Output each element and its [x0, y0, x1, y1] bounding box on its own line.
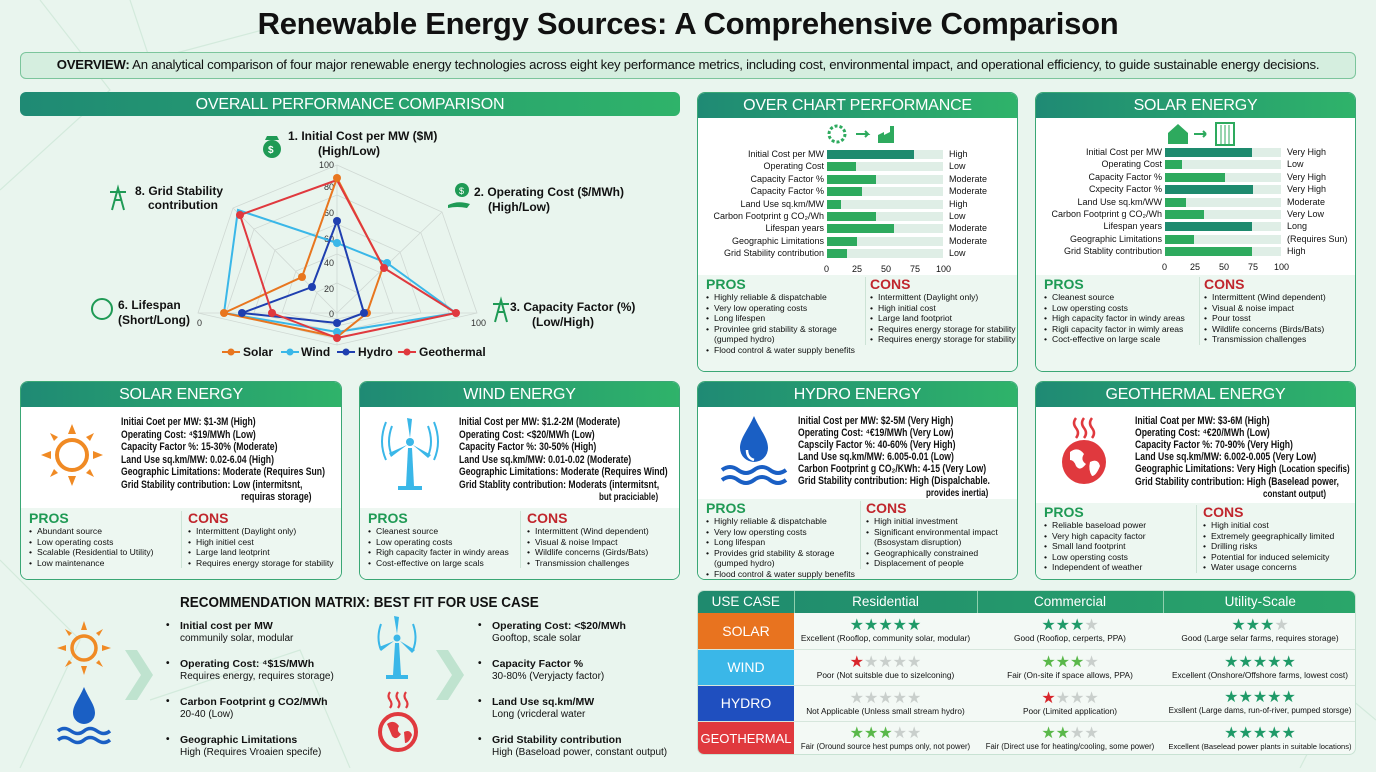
radar chart: (Short/Long) [118, 313, 190, 327]
pros and cons: Abundant source [37, 526, 102, 536]
pros and cons: Reliable baseload power [1052, 520, 1146, 530]
radar chart: 60 [324, 208, 334, 218]
bar chart [713, 149, 987, 274]
bar chart: High [949, 199, 968, 209]
pros and cons: Intermittent (Daylight only) [878, 292, 978, 302]
bar chart: 100 [936, 264, 951, 274]
icons: $ [459, 186, 464, 196]
facts: Capacity Factor %: 30-50% (High) [459, 441, 596, 453]
facts: Operating Cost: ⁴€19/MWh (Very Low) [798, 427, 953, 439]
panel: solar energy bars: Capacity Factor % [1088, 172, 1162, 182]
pros and cons: High initial investment [874, 516, 958, 526]
facts: but praciciable) [599, 492, 658, 503]
pros and cons: Low operating costs [376, 537, 452, 547]
heading [698, 382, 1017, 407]
bar chart [1051, 147, 1348, 272]
facts: Land Use sq.km/MW: 0.01-0.02 (Moderate) [459, 454, 631, 466]
facts: Carbon Footprint g CO₂/KWh: 4-15 (Very Low) [798, 463, 986, 475]
bar chart: Moderate [949, 186, 987, 196]
pros and cons: Transmission challenges [1212, 334, 1306, 344]
facts: Capscily Factor %: 40-60% (Very High) [798, 439, 955, 451]
use case table: Residential [852, 594, 919, 609]
pros and cons: Cleanest source [1052, 292, 1114, 302]
use case table: USE CASE [712, 594, 780, 609]
radar chart: 40 [324, 258, 334, 268]
bar chart: 25 [852, 264, 862, 274]
facts: requiras storage) [241, 491, 312, 503]
bar chart: Very Low [1287, 209, 1324, 219]
panel: overall performance comparison (radar) [20, 92, 680, 359]
pros and cons: CONS [866, 500, 906, 516]
radar chart [91, 129, 635, 359]
bar chart: High [949, 149, 968, 159]
pros and cons: CONS [1203, 504, 1243, 520]
pros and cons: Highly reliable & dispatchable [714, 516, 827, 526]
panel: solar energy bars: Geographic Limitations [1070, 234, 1162, 244]
bar chart: 75 [910, 264, 920, 274]
radar chart: (Low/High) [532, 315, 594, 329]
facts [459, 416, 668, 503]
bullet list 1: Carbon Footprint g CO2/MWh [180, 696, 328, 708]
pros and cons: Requires energy storage for stability [196, 558, 334, 568]
bar chart: Long [1287, 221, 1307, 231]
panel: solar energy bars: 0 [1162, 262, 1167, 272]
bullet list 1: High (Requires Vroaien specife) [180, 747, 321, 758]
panel: over chart performance: Carbon Footprint g CO₂/Wh [713, 211, 824, 221]
pros and cons: Large land leotprint [196, 547, 270, 557]
pros and cons [360, 508, 679, 579]
pros and cons: Requires energy storage for stability [878, 324, 1016, 334]
bar chart: 75 [1248, 262, 1258, 272]
icon: sun [57, 621, 111, 675]
heading [698, 93, 1017, 118]
radar chart: 6. Lifespan [118, 298, 181, 312]
facts: provides inertia) [926, 488, 988, 499]
bar chart: 100 [1274, 262, 1289, 272]
panel: over chart performance [697, 92, 1018, 372]
pros and cons: Coct-effective on large scale [1052, 334, 1160, 344]
bar chart: Moderate [1287, 197, 1325, 207]
heading: SOLAR ENERGY [119, 386, 243, 403]
heading [20, 92, 680, 116]
pros and cons: Independent of weather [1052, 562, 1142, 572]
facts: Initial Coat per MW: $3-6M (High) [1135, 415, 1270, 427]
pros and cons: Intermittent (Wind dependent) [535, 526, 649, 536]
pros and cons: CONS [870, 276, 910, 292]
facts: Capacity Factor %: 15-30% (Moderate) [121, 441, 277, 453]
pros and cons: Long lifespan [714, 537, 765, 547]
heading [1036, 93, 1355, 118]
radar chart: 2. Operating Cost ($/MWh) [474, 185, 624, 199]
pros and cons: Cost-effective on large scals [376, 558, 484, 568]
pros and cons: Provinlee grid stability & storage (gumped hydro) [714, 324, 837, 344]
facts: constant output) [1263, 489, 1326, 500]
bar chart: Very High [1287, 172, 1326, 182]
pros and cons: Transmission challenges [535, 558, 629, 568]
use case table: Poor (Limited application) [1023, 706, 1117, 716]
heading [1036, 382, 1355, 407]
bullet list 2 [478, 620, 667, 758]
facts: Grid Stability contribution: Low (intermitsnt, [121, 478, 302, 490]
pros and cons: Highly reliable & dispatchable [714, 292, 827, 302]
use case table: ★★★★★ [1224, 689, 1296, 706]
panel: wind energy [359, 381, 680, 580]
use case table: Good (Large selar farms, requires storage) [1181, 633, 1339, 643]
facts: Capacity Factor %: 70-90% (Very High) [1135, 439, 1293, 451]
icons: house to panel [1168, 122, 1235, 146]
panel: over chart performance: Land Use sq.km/MW [740, 199, 824, 209]
radar chart: 60 [324, 234, 334, 244]
facts: Land Use sq.km/MW: 0.02-6.04 (High) [121, 454, 274, 466]
bullet list 1: communily solar, modular [180, 633, 293, 644]
use case table: ★★★★ [1041, 617, 1099, 634]
use case table: HYDRO [721, 695, 771, 711]
pros and cons: High initiel cest [196, 537, 254, 547]
title: Renewable Energy Sources: A Comprehensive Comparison [258, 6, 1118, 41]
facts: Operating Cost: ⁴€20/MWh (Low) [1135, 427, 1270, 439]
use case table [697, 590, 1356, 755]
legend [222, 345, 486, 359]
panel: solar energy bars: Lifespan years [1103, 221, 1162, 231]
arrow [436, 650, 464, 700]
pros and cons [698, 275, 1017, 371]
use case table: Not Applicable (Unless small stream hydro) [806, 706, 965, 716]
pros and cons: Pour tosst [1212, 313, 1251, 323]
pros and cons: PROS [1044, 276, 1084, 292]
panel: over chart performance: Initial Cost per MW [748, 149, 824, 159]
panel: solar energy bars: Grid Stablity contribution [1064, 246, 1162, 256]
bullet list 2: High (Baseload power, constant output) [492, 747, 667, 758]
heading [21, 382, 341, 407]
radar chart: 3. Capacity Factor (%) [510, 300, 635, 314]
use case table: Exsllent (Large dams, run-of-river, pumped storsge) [1169, 706, 1351, 715]
pros and cons: Low opersting costs [1052, 303, 1128, 313]
heading: SOLAR ENERGY [1134, 97, 1257, 114]
pros and cons: High capacity factor in windy areas [1052, 313, 1185, 323]
radar chart: contribution [148, 198, 218, 212]
facts: Operating Cost: <$20/MWh (Low) [459, 428, 595, 440]
panel: over chart performance: Lifespan years [765, 223, 824, 233]
radar chart: (High/Low) [488, 200, 550, 214]
facts: Geographic Limitations: Very High (Location specifis) [1135, 463, 1350, 475]
pros and cons: Flood control & water supply benefits [714, 345, 855, 355]
panel: over chart performance: Grid Stability contribution [724, 248, 824, 258]
panel: solar energy bars: Initial Cost per MW [1086, 147, 1162, 157]
use case table: ★★★★★ [850, 690, 921, 706]
pros and cons: Righ capacity facter in windy areas [376, 547, 509, 557]
pros and cons: PROS [368, 510, 408, 526]
panel: solar energy bars: Operating Cost [1101, 159, 1162, 169]
panel: solar energy bars [1035, 92, 1356, 372]
pros and cons: Long lifespen [714, 313, 765, 323]
bar chart: Moderate [949, 236, 987, 246]
pros and cons: Very low operating costs [714, 303, 807, 313]
pros and cons: Intermittent (Wind dependent) [1212, 292, 1326, 302]
use case table: Fair (On-site if space allows, PPA) [1007, 670, 1133, 680]
bullet list 2: Long (vricderal water [492, 709, 585, 720]
bar chart: Low [949, 248, 966, 258]
bar chart: Low [1287, 159, 1304, 169]
facts: Initiai Coet per MW: $1-3M (High) [121, 416, 256, 428]
pros and cons [1036, 275, 1355, 371]
panel: solar energy [20, 381, 342, 580]
heading: RECOMMENDATION MATRIX: BEST FIT FOR USE CASE [180, 594, 539, 611]
pros and cons: CONS [1204, 276, 1244, 292]
icons: $ [268, 145, 274, 156]
pros and cons: Low maintenance [37, 558, 104, 568]
use case table: ★★★★ [1231, 617, 1289, 634]
legend: Wind [301, 345, 330, 359]
pros and cons: Requires energy storage for stability [878, 334, 1016, 344]
pros and cons: Intermittent (Daylight only) [196, 526, 296, 536]
legend: Hydro [358, 345, 393, 359]
use case table: Utility-Scale [1225, 594, 1296, 609]
pros and cons: Visual & noise impact [1212, 303, 1294, 313]
icon: water drop [720, 416, 788, 485]
use case table: ★★★★ [1041, 725, 1099, 742]
pros and cons: Very high capacity factor [1052, 531, 1146, 541]
use case table: WIND [727, 659, 765, 675]
pros and cons [1036, 503, 1355, 579]
bar chart: High [1287, 246, 1306, 256]
pros and cons: Visual & noise Impact [535, 537, 617, 547]
panel: over chart performance: Geographic Limitations [732, 236, 824, 246]
radar chart: 100 [319, 160, 334, 170]
bullet list 2: Gooftop, scale solar [492, 633, 581, 644]
facts: Initial Cost per MW: $2-5M (Very High) [798, 415, 953, 427]
pros and cons: PROS [1044, 504, 1084, 520]
radar chart: 8. Grid Stability [135, 184, 223, 198]
overview box: OVERVIEW: An analytical comparison of four major renewable energy technologies across eight key performance metrics, including cost, environmental impact, and operational efficiency, to guide sustainable energy decisions. [57, 57, 1319, 72]
radar chart: 20 [324, 284, 334, 294]
use case table: ★★★★★ [850, 725, 921, 742]
pros and cons: Drilling risks [1211, 541, 1257, 551]
bullet list 2: Grid Stability contribution [492, 734, 622, 746]
bar chart: 50 [881, 264, 891, 274]
facts: Land Use sq.km/MW: 6.005-0.01 (Low) [798, 451, 954, 463]
facts: Operating Cost: ⁴$19/MWh (Low) [121, 428, 256, 440]
bullet list 1: Operating Cost: ⁴$1S/MWh [180, 658, 314, 670]
use case table: Poor (Not suitsble due to sizelconing) [817, 670, 954, 680]
bullet list 2: 30-80% (Veryjacty factor) [492, 671, 604, 682]
panel: solar energy bars: Carbon Footprint g CO₂/Wh [1051, 209, 1162, 219]
panel: over chart performance: Capacity Factor % [750, 186, 824, 196]
use case table: Excellent (Onshore/Offshore farms, lowest cost) [1172, 670, 1348, 680]
use case table: GEOTHERMAL [700, 731, 792, 746]
use case table: ★★★★★ [850, 617, 921, 634]
bullet list 1: Geographic Limitations [180, 734, 297, 746]
icons: gear to factory [828, 124, 894, 144]
bar chart: Moderate [949, 174, 987, 184]
panel: hydro energy [697, 381, 1018, 580]
radar chart: 0 [329, 309, 334, 319]
heading: HYDRO ENERGY [794, 386, 921, 403]
pros and cons: Wildlife concerns (Girds/Bats) [535, 547, 648, 557]
use case table: SOLAR [722, 623, 770, 639]
use case table: Good (Roofiop, cerperts, PPA) [1014, 633, 1126, 643]
facts: Land Use sq.km/MW: 6.002-0.005 (Very Low) [1135, 451, 1316, 463]
panel: over chart performance: Capacity Factor % [750, 174, 824, 184]
use case table: Commercial [1034, 594, 1106, 609]
icon: water drop [56, 687, 112, 744]
pros and cons: Wildlife concerns (Birds/Bats) [1212, 324, 1324, 334]
bar chart: Moderate [949, 223, 987, 233]
bullet list 2: Operating Cost: <$20/MWh [492, 620, 626, 632]
use case table: Excellent (Rooflop, community solar, modular) [801, 633, 970, 643]
use case table: ★★★★★ [1224, 654, 1296, 670]
bar chart: 50 [1219, 262, 1229, 272]
use case table: Fair (Direct use for heating/cooling, some power) [986, 742, 1154, 751]
bullet list 1: Initial cost per MW [180, 620, 273, 632]
panel: solar energy bars: Cxpecity Factor % [1089, 184, 1162, 194]
pros and cons: CONS [188, 510, 228, 526]
use case table: Excellent (Baselead power plants in suitable locations) [1168, 742, 1352, 751]
pros and cons: Low operating costs [37, 537, 113, 547]
arrow [125, 650, 153, 700]
radar chart: 1. Initial Cost per MW ($M) [288, 129, 437, 143]
radar chart: 0 [197, 318, 202, 328]
bullet list 2: Capacity Factor % [492, 658, 583, 670]
pros and cons: Potential for induced selemicity [1211, 552, 1329, 562]
pros and cons: Extremely geegraphically limited [1211, 531, 1334, 541]
heading: OVERALL PERFORMANCE COMPARISON [196, 96, 504, 113]
pros and cons: CONS [527, 510, 567, 526]
facts: Grid Stability contribution: High (Dispalchable. [798, 475, 990, 487]
pros and cons: Displacement of people [874, 558, 964, 568]
pros and cons: Water usage concerns [1211, 562, 1297, 572]
panel: solar energy bars: Land Use sq.km/WW [1077, 197, 1162, 207]
pros and cons: Very low opersting costs [714, 527, 807, 537]
bar chart: 25 [1190, 262, 1200, 272]
pros and cons: Provides grid stability & storage (gumped hydro) [714, 548, 834, 568]
icon: wind turbine [378, 616, 416, 679]
bar chart: (Requires Sun) [1287, 234, 1348, 244]
pros and cons: High initial cost [1211, 520, 1269, 530]
use case table: ★★★★★ [850, 654, 921, 670]
radar chart: (High/Low) [318, 144, 380, 158]
pros and cons: Geographically constrained [874, 548, 978, 558]
legend: Geothermal [419, 345, 486, 359]
heading [360, 382, 679, 407]
pros and cons [698, 499, 1017, 579]
icon: wind turbine [381, 418, 439, 490]
legend: Solar [243, 345, 273, 359]
bar chart: Low [949, 161, 966, 171]
pros and cons [21, 508, 341, 579]
bar chart: Low [949, 211, 966, 221]
icon: globe [378, 691, 418, 752]
facts: Initial Cost per MW: $1.2-2M (Moderate) [459, 416, 620, 428]
heading: OVER CHART PERFORMANCE [743, 97, 972, 114]
pros and cons: PROS [706, 276, 746, 292]
recommendation matrix [56, 594, 667, 758]
facts [798, 415, 990, 499]
pros and cons: Low opersting costs [1052, 552, 1128, 562]
panel: over chart performance: 0 [824, 264, 829, 274]
pros and cons: Rigli capacity factor in wimly areas [1052, 324, 1183, 334]
heading: WIND ENERGY [463, 386, 576, 403]
bullet list 1: Requires energy, requires storage) [180, 671, 334, 682]
bullet list 2: Land Use sq.km/MW [492, 696, 594, 708]
pros and cons: PROS [706, 500, 746, 516]
pros and cons: Flood control & water supply benefits [714, 569, 855, 579]
icon: sun [41, 424, 103, 486]
pros and cons: High initial cost [878, 303, 936, 313]
pros and cons: Significant environmental impact (Bsosystam disruption) [874, 527, 998, 547]
overview box [20, 52, 1356, 79]
use case table: Fair (Oround source hest pumps only, not power) [801, 742, 970, 751]
use case table: ★★★★★ [1224, 725, 1296, 742]
icon: globe with heat [1062, 417, 1106, 484]
facts: Geographic Limitations: Moderate (Requires Sun) [121, 466, 325, 478]
bullet list 1: 20-40 (Low) [180, 709, 233, 720]
facts [121, 416, 325, 503]
panel: geothermal energy [1035, 381, 1356, 580]
pros and cons: Small land footprint [1052, 541, 1126, 551]
icons [92, 136, 509, 322]
use case table: ★★★★ [1041, 690, 1099, 706]
pros and cons: Cleanest source [376, 526, 438, 536]
facts: Grid Stability contribution: High (Baselead power, [1135, 476, 1339, 488]
facts: Grid Stablity contribution: Moderats (intermitsnt, [459, 478, 659, 490]
facts: Geographic Limitations: Moderate (Requires Wind) [459, 466, 668, 478]
bar chart: Very High [1287, 147, 1326, 157]
radar chart: 100 [471, 318, 486, 328]
heading: GEOTHERMAL ENERGY [1105, 386, 1286, 403]
radar chart: 80 [324, 182, 334, 192]
bar chart: Very High [1287, 184, 1326, 194]
pros and cons: Scalable (Residential to Utility) [37, 547, 154, 557]
bullet list 1 [166, 620, 334, 758]
facts [1135, 415, 1350, 500]
panel: over chart performance: Operating Cost [763, 161, 824, 171]
use case table: ★★★★ [1041, 654, 1099, 670]
pros and cons: PROS [29, 510, 69, 526]
pros and cons: Large land footpriot [878, 313, 952, 323]
